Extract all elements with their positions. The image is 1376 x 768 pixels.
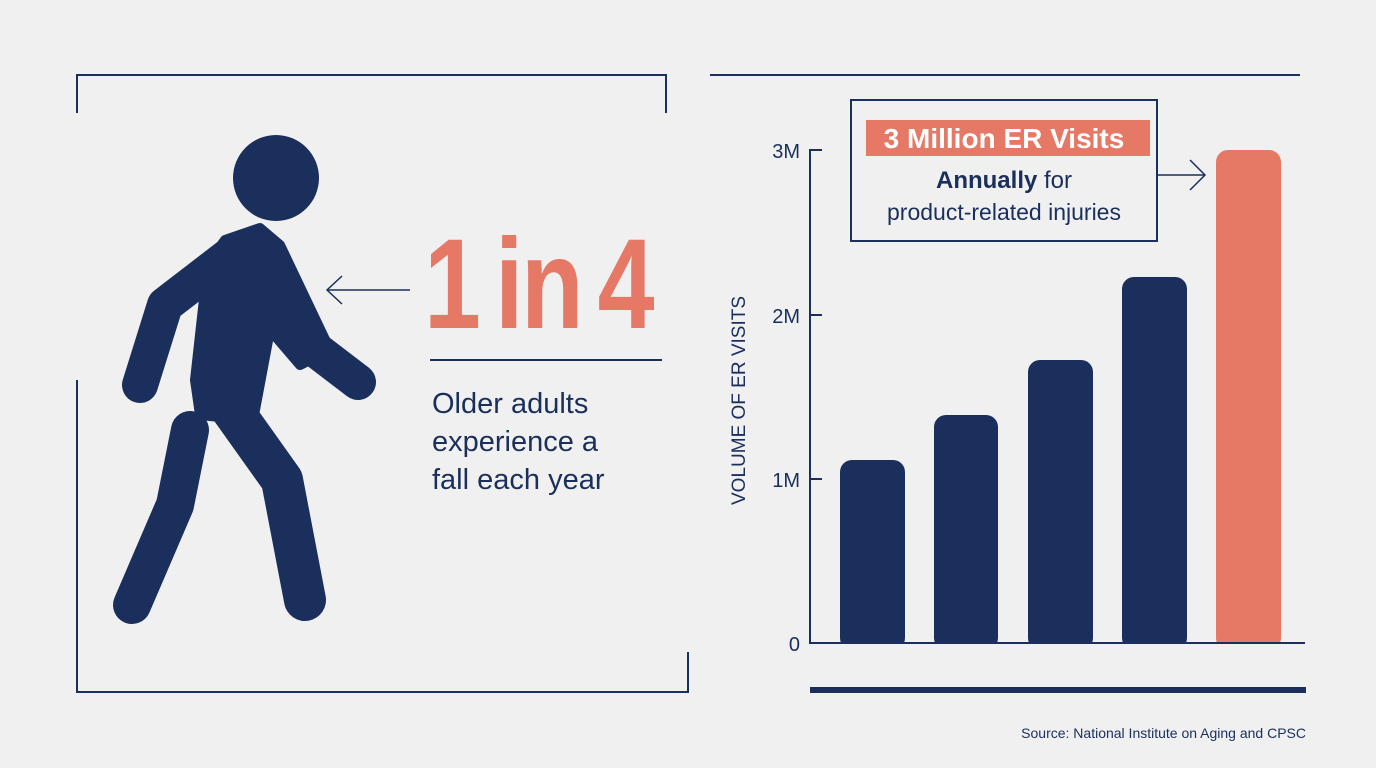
- icon: walking person: [132, 135, 358, 605]
- callout: 3 Million ER Visits: [884, 123, 1124, 154]
- bar chart: VOLUME OF ER VISITS: [729, 296, 750, 505]
- text: description: experience a: [432, 426, 598, 458]
- arrow: left: [327, 276, 410, 304]
- text: description: fall each year: [432, 464, 604, 496]
- callout: Annually for: [936, 167, 1072, 194]
- callout: [851, 100, 1157, 241]
- source: Source: National Institute on Aging and CPSC: [1021, 725, 1306, 741]
- text: description: Older adults: [432, 388, 588, 420]
- bar chart: 0: [789, 634, 800, 656]
- bar chart: 2M: [772, 306, 800, 328]
- bar chart: 3M: [772, 141, 800, 163]
- stat: 1 in 4: 1 in 4: [424, 213, 652, 356]
- callout: product-related injuries: [887, 199, 1121, 225]
- arrow: callout to bar: [1157, 160, 1205, 190]
- text: description: [432, 388, 604, 496]
- bar chart: 1M: [772, 470, 800, 492]
